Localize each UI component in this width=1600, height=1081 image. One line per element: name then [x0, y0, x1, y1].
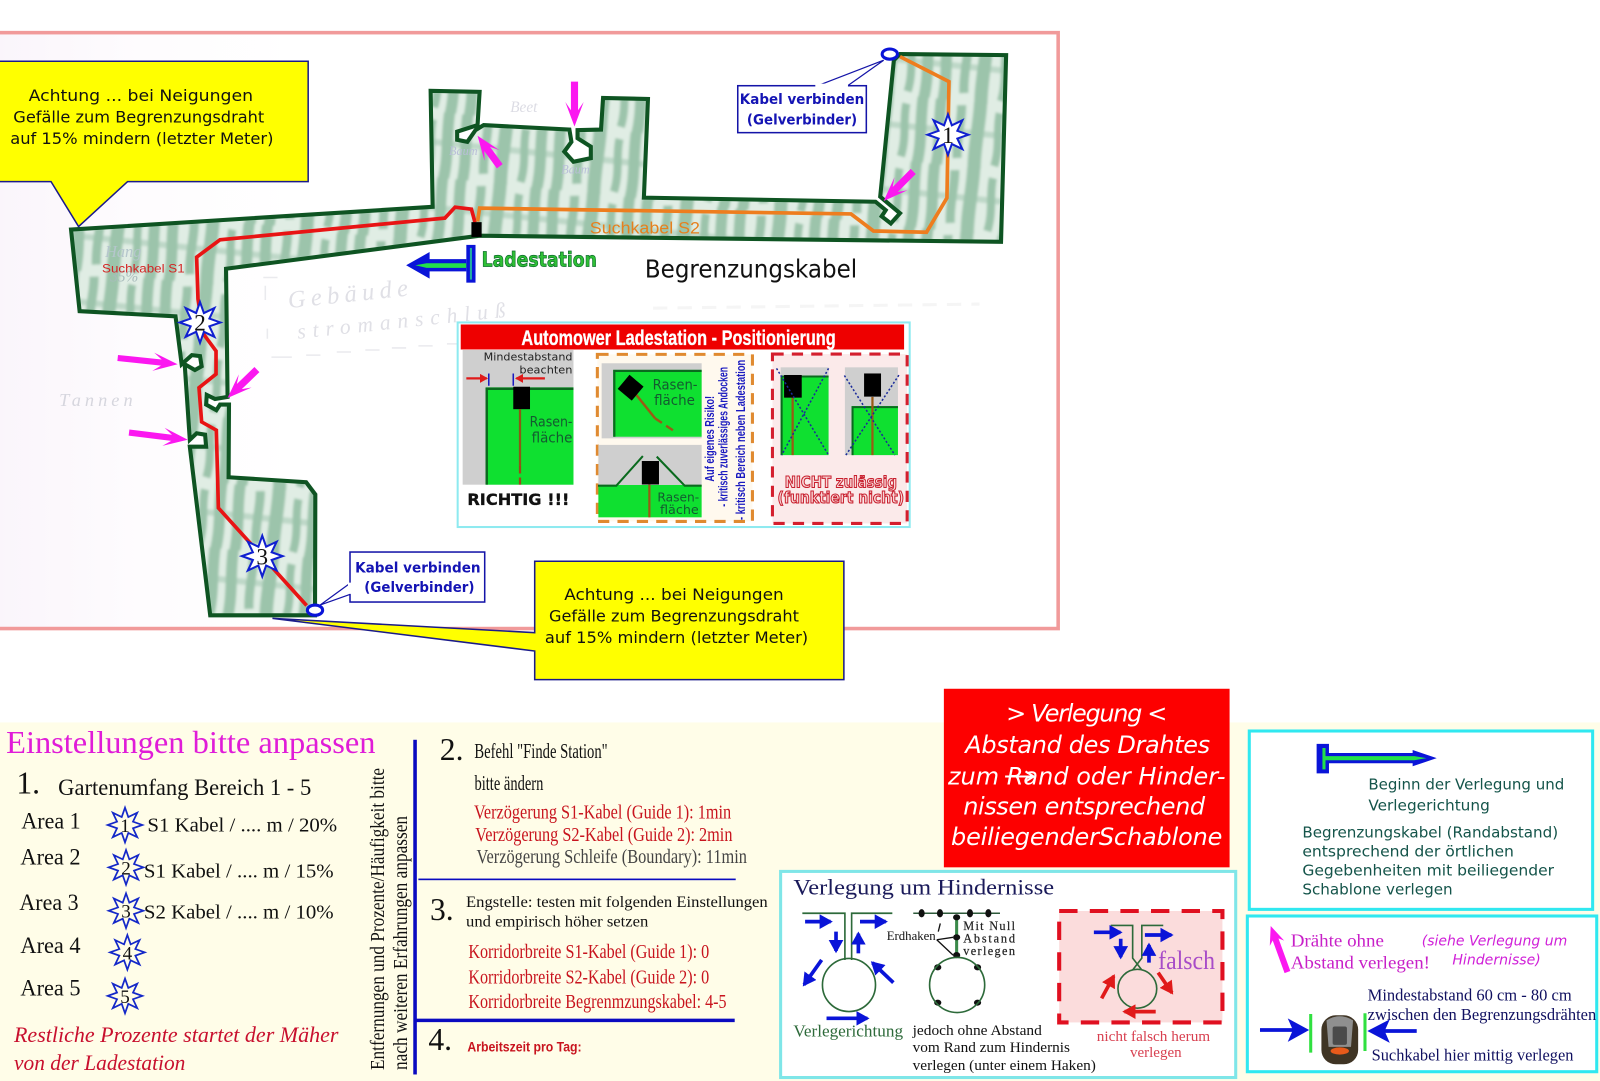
panel: Verlegung note (red): beiliegenderSchablone	[951, 823, 1222, 851]
label: Suchkabel S2: Suchkabel S2	[590, 220, 700, 238]
faint notes on the lawn: Hang	[104, 242, 141, 261]
star legend 4: 4	[123, 943, 133, 964]
charging station	[471, 222, 482, 237]
text: jedoch ohne Abstand	[912, 1023, 1096, 1074]
callout: Achtung unten: Achtung ... bei Neigungen	[564, 585, 784, 604]
sub-panel: eigenes Risiko: Rasen-	[657, 491, 699, 505]
sub-panel: richtig: RICHTIG !!!	[467, 490, 569, 509]
callout: Kabel verbinden oben: (Gelverbinder)	[747, 112, 857, 128]
sub-panel: nicht zulässig: (funktiert nicht)	[778, 488, 904, 507]
star legend 3	[109, 893, 143, 928]
sub-panel: nicht zulässig: NICHT zulässig	[785, 473, 897, 492]
panel: Verlegung note (red): > Verlegung <	[1006, 699, 1167, 727]
faint notes on the lawn: 35%	[109, 269, 138, 286]
star 1: 1	[942, 123, 954, 149]
callout: Achtung unten: auf 15% mindern (letzter Meter)	[545, 628, 808, 647]
divider lines	[413, 740, 736, 1074]
star 2	[180, 302, 220, 343]
callout: Achtung oben: Achtung ... bei Neigungen	[29, 86, 253, 105]
vertical note: Entfernungen und Prozente/Häufigkeit bitte	[367, 768, 389, 1070]
label: Begrenzungskabel: Begrenzungskabel	[645, 255, 857, 284]
section 1: Gartenumfang: Area 4	[20, 933, 81, 959]
sub-panel: eigenes Risiko: - kritisch zuverlässiges Andocken	[715, 367, 730, 507]
section 1: Gartenumfang: 1.	[16, 765, 40, 800]
text: jedoch ohne Abstand: vom Rand zum Hindernis	[913, 1040, 1070, 1056]
diagram: Erdhaken	[887, 909, 1016, 1013]
vertical note	[367, 768, 412, 1070]
section 1: Gartenumfang: Area 5	[20, 976, 81, 1002]
icon: mower	[1321, 1015, 1358, 1064]
section 4: Arbeitszeit: 4.	[428, 1022, 452, 1057]
sub-panel: richtig	[463, 350, 573, 509]
text: nicht falsch herum: nicht falsch herum	[1097, 1029, 1211, 1045]
lawn hatching	[71, 54, 1006, 615]
section 1: Gartenumfang: S2 Kabel / .... m / 10%	[144, 901, 334, 923]
lower cream background	[0, 722, 1600, 1081]
faint notes on the lawn: Baum	[449, 144, 478, 158]
connector ring top	[882, 49, 897, 59]
search cable S1	[197, 207, 475, 605]
callout: Kabel verbinden unten: (Gelverbinder)	[364, 580, 474, 596]
text: jedoch ohne Abstand: jedoch ohne Abstand	[912, 1023, 1042, 1039]
faint handwritten notes	[59, 275, 980, 410]
search cable S2	[478, 57, 949, 232]
panel: Beginn der Verlegung: Gegebenheiten mit beiliegender	[1302, 862, 1555, 879]
star legend 2: 2	[121, 858, 131, 879]
star legend 1	[108, 808, 142, 842]
sub-panel: nicht zulässig	[772, 354, 907, 523]
callout: Achtung unten: Gefälle zum Begrenzungsdraht	[549, 606, 799, 625]
arrow: Ladestation direction	[406, 245, 476, 283]
note: Restliche Prozente	[13, 1022, 339, 1075]
section 3: Engstelle: 3.	[430, 892, 454, 927]
callout: Kabel verbinden oben	[738, 60, 884, 133]
callout: Achtung unten	[272, 561, 844, 680]
star 2: 2	[194, 311, 206, 337]
panel: Mindestabstand: Mindestabstand 60 cm - 80 cm	[1368, 986, 1572, 1005]
panel: Mindestabstand: zwischen den Begrenzungsdrähten	[1368, 1005, 1596, 1024]
star legend 1: 1	[120, 816, 130, 837]
blue arrows	[1260, 1030, 1417, 1031]
panel: Beginn der Verlegung: Beginn der Verlegung und	[1368, 776, 1564, 793]
sub-panel: eigenes Risiko: fläche	[660, 503, 699, 517]
panel: Verlegung note (red): nissen entsprechend	[963, 792, 1206, 820]
panel: Mindestabstand: Hindernisse)	[1452, 952, 1541, 968]
diagram: Erdhaken: Erdhaken	[887, 929, 936, 943]
heading: Verlegung um Hindernisse	[793, 874, 1054, 899]
faint handwritten notes: Gebäude	[287, 275, 409, 314]
diagram: Verlegerichtung	[793, 913, 903, 1041]
sub-panel: richtig: Mindestabstand	[484, 351, 572, 364]
star legend 5: 5	[120, 987, 130, 1008]
panel: Beginn der Verlegung	[1249, 731, 1593, 909]
label: Ladestation: Ladestation	[482, 247, 597, 271]
diagram: Erdhaken: Abstand	[963, 931, 1015, 945]
section 3: Engstelle: Korridorbreite S1-Kabel (Guide 1): 0	[468, 941, 709, 963]
vertical note: nach weiteren Erfahrungen anpassen	[390, 816, 412, 1070]
section 2: Finde Station: 2.	[440, 732, 464, 767]
section 1: Gartenumfang: Area 2	[20, 844, 81, 870]
panel: Verlegung note (red): Abstand des Drahtes	[963, 731, 1210, 759]
magenta arrow	[1264, 923, 1295, 975]
section 3: Engstelle: Korridorbreite Begrenmzungskabel: 4-5	[468, 991, 727, 1013]
text: jedoch ohne Abstand: verlegen (unter einem Haken)	[913, 1058, 1096, 1074]
star 3: 3	[256, 544, 268, 570]
label: Suchkabel S1: Suchkabel S1	[102, 261, 185, 275]
diagram: falsch	[1059, 911, 1222, 1022]
panel: Automower Ladestation Positionierung	[458, 322, 910, 527]
diagram: Verlegerichtung: Verlegerichtung	[793, 1022, 903, 1041]
connector ring bottom	[307, 605, 323, 615]
sub-panel: eigenes Risiko: Auf eigenes Risiko!	[702, 396, 717, 482]
callout: Achtung oben: auf 15% mindern (letzter Meter)	[10, 129, 273, 148]
sub-panel: richtig: beachten	[519, 363, 572, 376]
star legend 5	[108, 979, 142, 1013]
section 3: Engstelle: Engstelle: testen mit folgenden Einstellungen	[466, 894, 768, 911]
star legend 3: 3	[121, 902, 131, 923]
sub-panel: richtig: Rasen-	[530, 415, 572, 431]
section 2: Finde Station: Verzögerung S2-Kabel (Guide 2): 2min	[475, 824, 732, 846]
sub-panel: eigenes Risiko: Rasen-	[653, 377, 698, 393]
callout: Achtung oben: Gefälle zum Begrenzungsdraht	[13, 107, 264, 126]
diagram: Erdhaken: verlegen	[963, 944, 1015, 958]
panel: Mindestabstand: Drähte ohne	[1291, 931, 1384, 951]
callout: Achtung oben	[0, 61, 308, 227]
star 3	[242, 536, 283, 577]
text: nicht falsch herum	[1097, 1029, 1211, 1061]
section 1: Gartenumfang	[16, 765, 337, 1013]
header bar: Automower Ladestation - Positionierung	[521, 326, 836, 350]
heading: Einstellungen bitte anpassen: Einstellungen bitte anpassen	[6, 725, 376, 760]
diagram: falsch: falsch	[1158, 945, 1215, 975]
section 2: Finde Station: Verzögerung S1-Kabel (Guide 1): 1min	[474, 801, 731, 823]
section 3: Engstelle: Korridorbreite S2-Kabel (Guide 2): 0	[468, 966, 709, 988]
section 2: Finde Station: bitte ändern	[474, 771, 544, 795]
sub-panel: eigenes Risiko	[597, 354, 752, 521]
section 4: Arbeitszeit: Arbeitszeit pro Tag:	[467, 1040, 582, 1056]
note: Restliche Prozente: von der Ladestation	[14, 1050, 185, 1075]
text: nicht falsch herum: verlegen	[1130, 1045, 1182, 1061]
section 2: Finde Station: Verzögerung Schleife (Boundary): 11min	[477, 846, 747, 868]
panel: Beginn der Verlegung: Verlegerichtung	[1368, 798, 1490, 815]
faint notes on the lawn: Beet	[510, 99, 538, 116]
sub-panel: eigenes Risiko: - kritisch Bereich neben Ladestation	[733, 360, 748, 520]
panel: Beginn der Verlegung: entsprechend der örtlichen	[1302, 844, 1514, 861]
callout: Kabel verbinden unten	[320, 552, 485, 605]
section 1: Gartenumfang: S1 Kabel / .... m / 20%	[147, 815, 337, 837]
panel: Verlegung note (red)	[944, 689, 1230, 867]
faint handwritten notes: Tannen	[59, 390, 133, 410]
T arrow	[1317, 744, 1437, 773]
panel: Beginn der Verlegung: Begrenzungskabel (Randabstand)	[1302, 824, 1558, 841]
section 3: Engstelle	[430, 892, 768, 1013]
section 3: Engstelle: und empirisch höher setzen	[466, 914, 648, 931]
green wires	[1311, 1013, 1365, 1053]
star legend 2	[109, 850, 143, 885]
callout: Kabel verbinden oben: Kabel verbinden	[740, 92, 864, 108]
faint handwritten notes: stromanschluß	[296, 298, 507, 344]
panel: Verlegung note (red): zum Rand oder Hinder-	[947, 763, 1226, 791]
panel: Mindestabstand: Abstand verlegen!	[1291, 952, 1430, 972]
panel: Mindestabstand	[1247, 916, 1597, 1072]
faint notes on the lawn	[104, 99, 590, 286]
section 1: Gartenumfang: Area 1	[21, 808, 81, 834]
sub-panel: eigenes Risiko: fläche	[654, 393, 695, 409]
section 1: Gartenumfang: Gartenumfang Bereich 1 - 5	[58, 775, 311, 800]
diagram: Erdhaken: Mit Null	[963, 919, 1016, 933]
panel: Beginn der Verlegung: Schablone verlegen	[1302, 881, 1453, 898]
section 4: Arbeitszeit	[428, 1022, 582, 1057]
star 1	[928, 114, 968, 155]
magenta arrows: obstacles	[117, 82, 920, 449]
section 1: Gartenumfang: Area 3	[19, 890, 79, 916]
callout: Kabel verbinden unten: Kabel verbinden	[355, 560, 481, 576]
panel: Mindestabstand: Suchkabel hier mittig verlegen	[1372, 1046, 1573, 1065]
star legend 4	[110, 935, 145, 970]
boundary cable	[71, 54, 1006, 615]
faint notes on the lawn: Baum	[561, 162, 590, 176]
section 1: Gartenumfang: S1 Kabel / .... m / 15%	[144, 861, 334, 883]
sub-panel: richtig: fläche	[532, 430, 573, 446]
note: Restliche Prozente: Restliche Prozente startet der Mäher	[13, 1022, 339, 1047]
panel: Verlegung um Hindernisse	[781, 871, 1236, 1078]
section 2: Finde Station	[440, 732, 747, 868]
panel: Mindestabstand: (siehe Verlegung um	[1422, 934, 1567, 950]
section 2: Finde Station: Befehl "Finde Station"	[474, 739, 608, 763]
